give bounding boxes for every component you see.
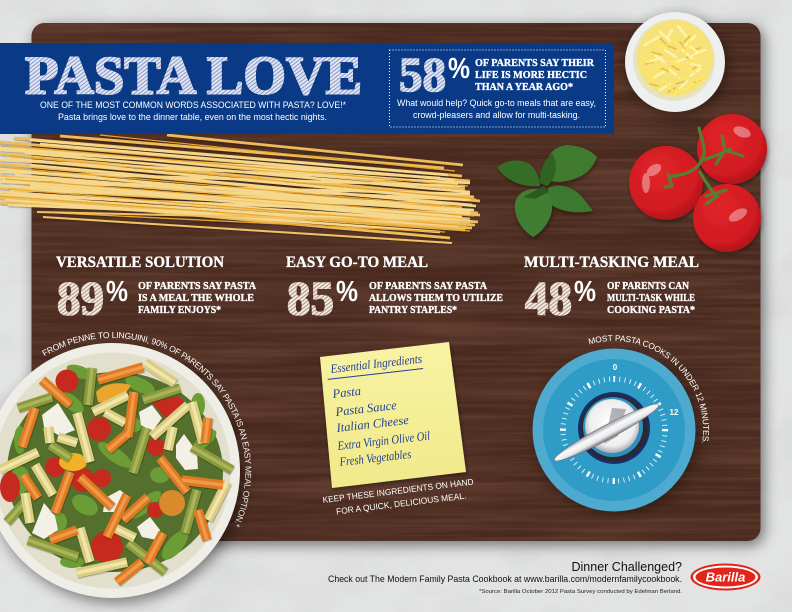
- sticky note: essential ingredients: Italian Cheese: [335, 413, 410, 435]
- stat: easy go-to meal: OF PARENTS SAY PASTA: [369, 281, 487, 292]
- spaghetti bundle: [0, 135, 480, 243]
- sticky note caption: [322, 477, 476, 518]
- kitchen timer: 0: [613, 363, 618, 372]
- dotted callout: 58%: LIFE IS MORE HECTIC: [475, 70, 587, 81]
- footer call to action: *Source: Barilla October 2012 Pasta Survey conducted by Edelman Berland.: [479, 589, 683, 595]
- stat: versatile solution: [56, 254, 256, 326]
- sticky note: essential ingredients: [320, 342, 466, 488]
- stat: versatile solution: IS A MEAL THE WHOLE: [138, 293, 254, 304]
- dotted callout: 58%: crowd-pleasers and allow for multi-tasking.: [413, 110, 580, 120]
- stat: versatile solution: VERSATILE SOLUTION: [56, 254, 224, 271]
- title: PASTA LOVE: [25, 46, 362, 106]
- subtitle line two: Pasta brings love to the dinner table, even on the most hectic nights.: [58, 112, 327, 122]
- stat: multi-tasking meal: OF PARENTS CAN: [607, 281, 689, 292]
- footer call to action: Check out The Modern Family Pasta Cookbook at www.barilla.com/modernfamilycookbook.: [328, 574, 682, 584]
- stat: easy go-to meal: EASY GO-TO MEAL: [286, 254, 428, 271]
- stat: versatile solution: %: [106, 276, 128, 308]
- stat: multi-tasking meal: MULTI-TASK WHILE: [607, 293, 695, 304]
- stat: multi-tasking meal: 48: [525, 272, 572, 326]
- tomatoes and mozzarella: [0, 370, 198, 563]
- subtitle: ONE OF THE MOST COMMON WORDS ASSOCIATED WITH PASTA? LOVE!*: [40, 100, 346, 110]
- curved caption around plate: FROM PENNE TO LINGUINI, 90% OF PARENTS SAY PASTA IS AN EASY MEAL OPTION.*: [42, 332, 252, 528]
- timer handle: [551, 399, 662, 466]
- stat: easy go-to meal: 85: [287, 272, 334, 326]
- dotted callout: 58%: OF PARENTS SAY THEIR: [475, 58, 594, 69]
- Barilla logo: Barilla: [706, 570, 745, 584]
- sticky note: essential ingredients: Pasta: [331, 384, 362, 401]
- stat: multi-tasking meal: MULTI-TASKING MEAL: [524, 254, 699, 271]
- stat: easy go-to meal: ALLOWS THEM TO UTILIZE: [369, 293, 503, 304]
- stat: multi-tasking meal: COOKING PASTA*: [607, 305, 695, 316]
- timer ticks: [563, 379, 665, 481]
- dotted callout: 58%: THAN A YEAR AGO*: [475, 82, 573, 93]
- icon: basil leaves: [497, 145, 597, 237]
- sticky note: essential ingredients: Extra Virgin Olive Oil: [336, 428, 431, 453]
- icon: bowl of grated cheese: [625, 12, 727, 116]
- sticky note caption: KEEP THESE INGREDIENTS ON HAND: [322, 477, 474, 505]
- dotted callout: 58%: [390, 47, 606, 127]
- kitchen timer: 12: [670, 408, 679, 417]
- penne pasta: [0, 363, 232, 582]
- wooden cutting board: [32, 23, 764, 545]
- dotted callout: 58%: 58: [399, 47, 446, 102]
- curved caption around timer: MOST PASTA COOKS IN UNDER 12 MINUTES.: [588, 335, 709, 442]
- stat: versatile solution: FAMILY ENJOYS*: [138, 305, 221, 316]
- sticky note caption: FOR A QUICK, DELICIOUS MEAL.: [336, 491, 467, 516]
- sticky note: essential ingredients: Essential Ingredients: [329, 352, 423, 376]
- stat: versatile solution: 89: [57, 272, 104, 326]
- dotted callout: 58%: %: [448, 53, 470, 85]
- salad greens: [7, 362, 223, 572]
- pasta salad plate: [0, 343, 243, 603]
- stat: multi-tasking meal: %: [574, 276, 596, 308]
- stat: easy go-to meal: %: [336, 276, 358, 308]
- dotted callout: 58%: What would help? Quick go-to meals that are easy,: [397, 98, 596, 108]
- blue title band: [0, 43, 614, 134]
- kitchen timer: [532, 348, 698, 515]
- stat: multi-tasking meal: [524, 254, 699, 326]
- stat: versatile solution: OF PARENTS SAY PASTA: [138, 281, 256, 292]
- icon: vine tomatoes: [629, 114, 767, 252]
- footer call to action: [328, 560, 683, 595]
- sticky note: essential ingredients: Fresh Vegetables: [338, 447, 412, 469]
- footer call to action: Dinner Challenged?: [572, 560, 682, 574]
- stat: easy go-to meal: PANTRY STAPLES*: [369, 305, 457, 316]
- Barilla logo: [690, 564, 760, 590]
- sticky note: essential ingredients: Pasta Sauce: [334, 398, 398, 419]
- stat: easy go-to meal: [286, 254, 503, 326]
